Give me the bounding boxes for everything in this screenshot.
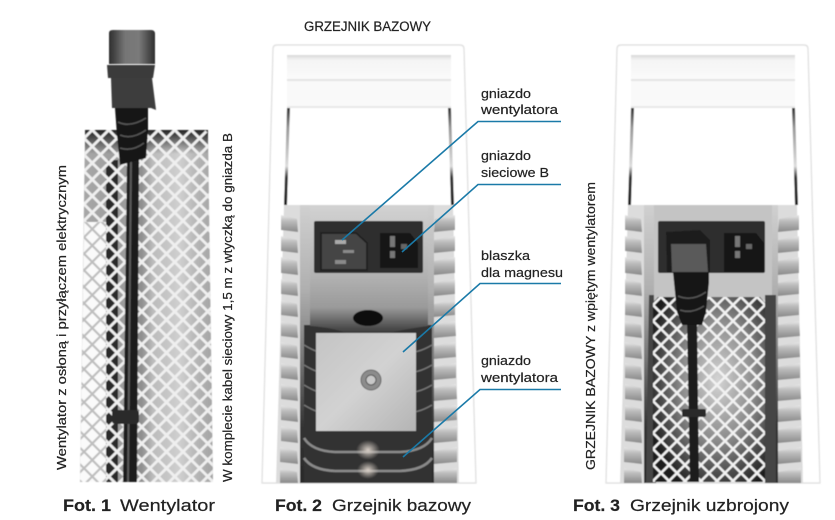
panel: Fot. 2 base heater photo bbox=[262, 45, 476, 483]
caption: Fot. 1: Fot. 1 bbox=[63, 496, 111, 515]
power cable bbox=[112, 158, 139, 482]
magnet plate bbox=[316, 333, 416, 431]
label: blaszka dla magnesu: dla magnesu bbox=[481, 265, 563, 280]
label: gniazdo sieciowe B: gniazdo bbox=[481, 148, 531, 163]
screw bbox=[361, 370, 381, 390]
socket panel bbox=[658, 221, 765, 273]
socket panel bbox=[314, 221, 423, 273]
plug and cable bbox=[666, 230, 710, 482]
heading: base heater: GRZEJNIK BAZOWY bbox=[304, 19, 431, 34]
caption: Fot. 3: Grzejnik uzbrojony bbox=[630, 496, 790, 515]
metal bracket bbox=[310, 205, 428, 333]
side label: heater with fan: GRZEJNIK BAZOWY z wpiętym wentylatorem bbox=[583, 182, 598, 470]
caption: Fot. 3: Fot. 3 bbox=[573, 496, 620, 515]
leader: blaszka dla magnesu bbox=[403, 284, 561, 352]
oval hole bbox=[353, 310, 383, 326]
label: lower gniazdo wentylatora: gniazdo bbox=[481, 353, 531, 368]
leader: gniazdo sieciowe B bbox=[402, 184, 561, 252]
side label: fan description: Wentylator z osłoną i przyłączem elektrycznym bbox=[54, 165, 69, 470]
side label: power cable: W komplecie kabel sieciowy 1,5 m z wtyczką do gniazda B bbox=[220, 133, 235, 482]
panel: Fot. 3 armed heater photo bbox=[606, 45, 820, 483]
fan mesh bbox=[653, 297, 765, 482]
heater body bbox=[606, 45, 820, 483]
label: blaszka dla magnesu: blaszka bbox=[481, 248, 531, 263]
caption: Fot. 2: Grzejnik bazowy bbox=[332, 496, 472, 515]
side ribs around fan bbox=[646, 295, 776, 483]
label: gniazdo sieciowe B: sieciowe B bbox=[481, 165, 549, 180]
heater body bbox=[262, 45, 476, 483]
leader: gniazdo wentylatora bbox=[342, 122, 561, 240]
dark ribs bbox=[304, 325, 432, 483]
caption: Fot. 1: Wentylator bbox=[120, 496, 215, 515]
caption: Fot. 2: Fot. 2 bbox=[275, 496, 322, 515]
label: gniazdo wentylatora: gniazdo bbox=[481, 86, 531, 101]
leader: lower gniazdo wentylatora bbox=[403, 390, 561, 457]
panel: Fot. 1 fan photo bbox=[80, 30, 213, 482]
metal bracket bbox=[654, 205, 772, 300]
label: lower gniazdo wentylatora: wentylatora bbox=[480, 370, 559, 385]
IEC plug bbox=[107, 30, 156, 165]
fan mesh guard bbox=[80, 130, 213, 482]
label: gniazdo wentylatora: wentylatora bbox=[480, 102, 559, 117]
